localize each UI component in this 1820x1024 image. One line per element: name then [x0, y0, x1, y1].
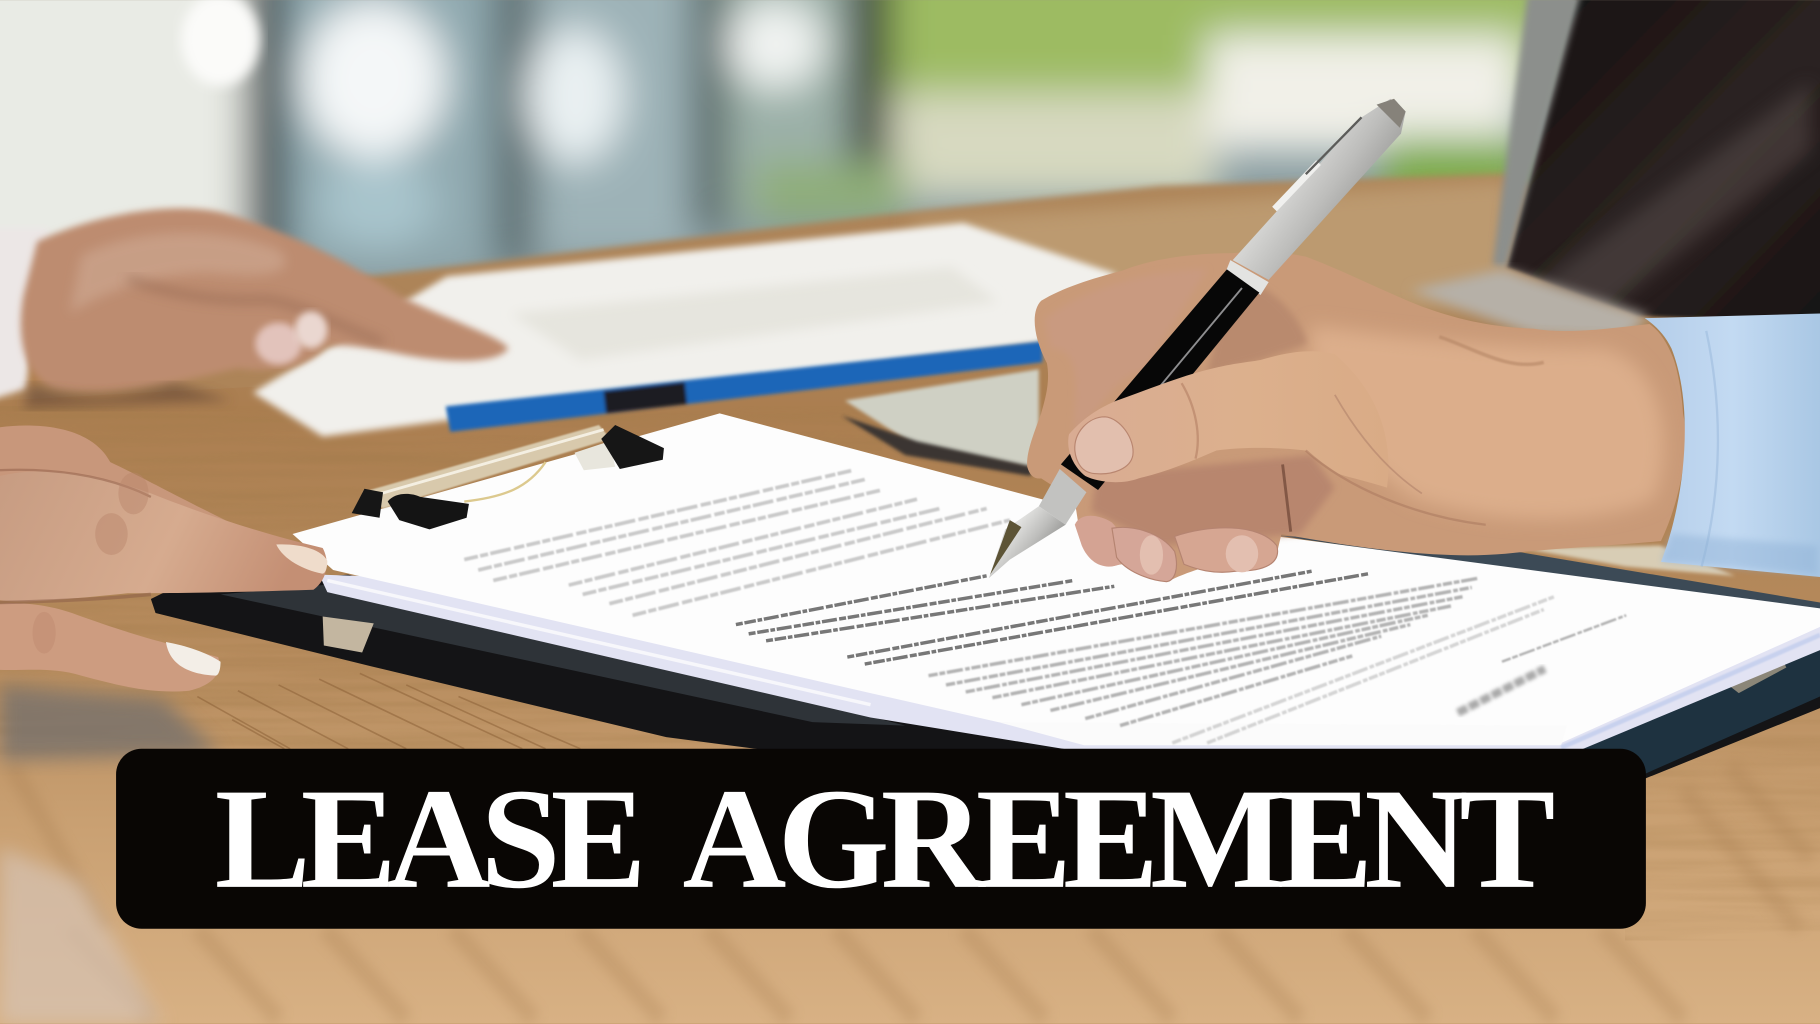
lease document pages [292, 413, 1820, 755]
printed text lines on the document [464, 470, 1626, 743]
back left hand [0, 208, 508, 409]
shirt sleeve [1645, 314, 1820, 577]
blurred office window background [0, 0, 1820, 302]
title banner [116, 749, 1646, 929]
metal clip of the clipboard [352, 425, 664, 529]
back document [253, 223, 1117, 476]
right hand behind the pen [1027, 252, 1685, 581]
title text: LEASE [215, 760, 647, 919]
right hand thumb and fingertips over the pen [1068, 351, 1486, 582]
front left hand [0, 426, 327, 691]
silver and black ballpoint pen [989, 99, 1406, 578]
laptop [1410, 0, 1820, 339]
blue pen on back document [446, 341, 1042, 432]
clipboard [151, 535, 1820, 801]
title text: AGREEMENT [682, 760, 1555, 919]
